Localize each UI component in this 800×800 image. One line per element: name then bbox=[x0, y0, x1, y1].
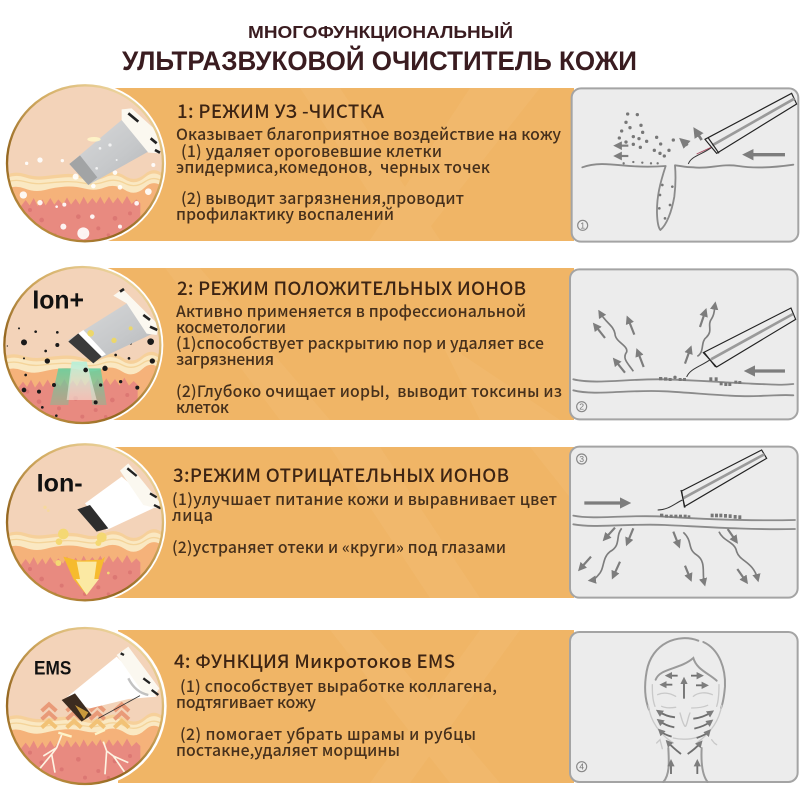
text block 1: профилактику воспалений bbox=[176, 202, 394, 225]
icon: white head bbox=[77, 463, 161, 532]
text block 3: (1)улучшает питание кожи и выравнивает цвет bbox=[172, 487, 557, 510]
diagram panel bbox=[570, 269, 798, 419]
text block 4: (1) способствует выработке коллагена, bbox=[180, 674, 497, 697]
icon: circle skin with ultrasonic head bbox=[4, 82, 166, 244]
number 3: 3 bbox=[579, 454, 584, 464]
panel: mode 1 ultrasonic cleaning bbox=[4, 82, 798, 244]
icon: circle skin with Ion+ bbox=[1, 264, 163, 426]
chevrons bbox=[42, 704, 129, 728]
diagram panel bbox=[570, 632, 798, 782]
arrows bbox=[580, 503, 758, 583]
text block 1: (1) удаляет ороговевшие клетки bbox=[181, 139, 442, 162]
particles bbox=[659, 376, 741, 386]
number 4: 4 bbox=[579, 762, 584, 772]
text block 4: постакне,удаляет морщины bbox=[176, 738, 400, 761]
text block 1: (2) выводит загрязнения,проводит bbox=[181, 186, 464, 209]
title line 1: МНОГОФУНКЦИОНАЛЬНЫЙ bbox=[248, 21, 513, 42]
text block 1: Оказывает благоприятное воздействие на кожу bbox=[176, 122, 561, 145]
text block 2: загрязнения bbox=[176, 347, 274, 370]
text block 4 bbox=[176, 674, 497, 761]
green beams bbox=[50, 368, 107, 405]
skin lines bbox=[573, 379, 793, 385]
diagram panel bbox=[572, 88, 798, 242]
text block 2: косметологии bbox=[176, 315, 286, 338]
orange band 1 bbox=[104, 88, 574, 241]
wand bbox=[688, 93, 797, 164]
text block 3 bbox=[172, 487, 557, 558]
icon: circle skin with EMS bbox=[3, 624, 167, 788]
title line 2: УЛЬТРАЗВУКОВОЙ ОЧИСТИТЕЛЬ КОЖИ bbox=[122, 45, 637, 76]
text block 3: (2)устраняет отеки и «круги» под глазами bbox=[172, 535, 506, 558]
panel: mode 4 EMS microcurrent bbox=[3, 624, 798, 788]
orange band 2 bbox=[104, 268, 574, 420]
label Ion-: Ion- bbox=[37, 470, 83, 498]
text block 1: эпидермиса,комедонов, черных точек bbox=[176, 155, 490, 178]
diagram 2 bbox=[570, 269, 798, 419]
text block 3: лица bbox=[172, 503, 213, 526]
text block 4: (2) помогает убрать шрамы и рубцы bbox=[180, 722, 476, 745]
diagram panel bbox=[570, 447, 798, 598]
text block 2: Активно применяется в профессиональной bbox=[176, 299, 526, 322]
face outline bbox=[645, 638, 725, 782]
lightning bbox=[40, 730, 128, 774]
number 2: 2 bbox=[579, 402, 584, 412]
wand bbox=[658, 450, 767, 510]
yellow funnel bbox=[63, 557, 105, 595]
icon: metal head bbox=[69, 108, 160, 185]
skin and pore bbox=[582, 164, 793, 230]
particles bbox=[660, 514, 741, 519]
text block 2: (1)способствует раскрытию пор и удаляет все bbox=[176, 331, 544, 354]
heading 3: 3:РЕЖИМ ОТРИЦАТЕЛЬНЫХ ИОНОВ bbox=[173, 461, 509, 488]
heading 1: 1: РЕЖИМ УЗ -ЧИСТКА bbox=[177, 97, 384, 124]
skin lines bbox=[573, 516, 795, 520]
label EMS: EMS bbox=[34, 659, 71, 680]
diagram 3 bbox=[570, 447, 798, 598]
number 3 bbox=[577, 454, 587, 464]
icon: white head with cord bbox=[62, 647, 159, 722]
orange band 3 bbox=[104, 447, 574, 598]
panel: mode 2 positive ions bbox=[1, 264, 798, 426]
debris dots bbox=[618, 112, 675, 220]
text block 2: клеток bbox=[176, 395, 229, 418]
panel: mode 3 negative ions bbox=[4, 441, 798, 603]
text block 2: (2)Глубоко очищает иорЫ, выводит токсины из bbox=[176, 379, 562, 402]
label Ion+: Ion+ bbox=[32, 284, 84, 314]
text block 2 bbox=[176, 299, 562, 418]
arrows bbox=[617, 131, 785, 156]
text block 1 bbox=[176, 122, 561, 225]
massage arrows bbox=[658, 676, 712, 774]
number 1 bbox=[578, 220, 588, 230]
orange band 4 bbox=[118, 630, 574, 783]
title bbox=[122, 21, 637, 76]
diagram 4 bbox=[570, 632, 798, 782]
number 4 bbox=[577, 762, 587, 772]
wand bbox=[687, 308, 796, 377]
icon: circle skin with Ion- bbox=[4, 441, 166, 603]
diagram 1 bbox=[572, 88, 798, 242]
number 1: 1 bbox=[580, 220, 585, 230]
text block 4: подтягивает кожу bbox=[176, 690, 316, 713]
heading 4: 4: ФУНКЦИЯ Микротоков EMS bbox=[174, 647, 455, 674]
heading 2: 2: РЕЖИМ ПОЛОЖИТЕЛЬНЫХ ИОНОВ bbox=[177, 274, 526, 301]
number 2 bbox=[577, 402, 587, 412]
arrows bbox=[595, 305, 785, 373]
icon: black metal head bbox=[68, 289, 159, 363]
